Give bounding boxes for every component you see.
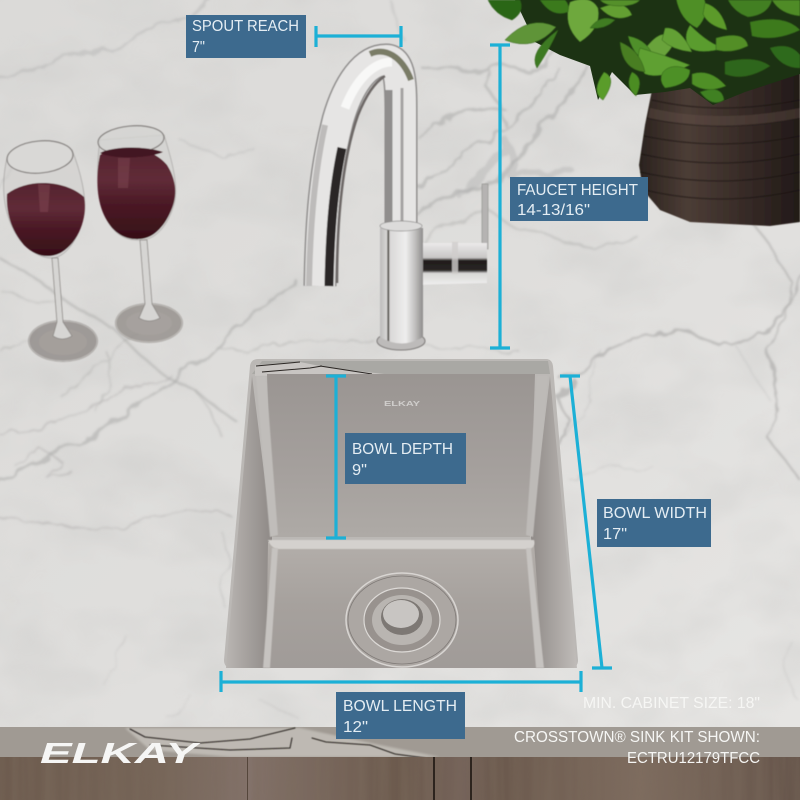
label: bowl width: BOWL WIDTH (603, 505, 707, 522)
faucet lower body (380, 228, 423, 344)
sink kit note: CROSSTOWN® SINK KIT SHOWN: (514, 729, 760, 746)
back wall (267, 374, 535, 537)
label: bowl width (597, 499, 711, 547)
label: bowl depth (345, 433, 466, 484)
corner rounds (256, 376, 278, 537)
dimension: bowl depth arrow (326, 376, 346, 538)
label: spout reach (186, 15, 306, 58)
faucet handle (482, 184, 488, 249)
foliage mass (515, 0, 800, 105)
Elkay logo: ELKAY (40, 738, 201, 770)
label: bowl length: 12" (343, 719, 368, 736)
sink kit note (514, 729, 760, 767)
sink kit note: ECTRU12179TFCC (627, 750, 760, 767)
label: bowl length (336, 692, 465, 739)
sink outline and rim (224, 359, 578, 668)
potted plant (488, 0, 800, 226)
faucet (309, 52, 488, 350)
left wall (226, 376, 272, 668)
label: bowl depth: 9" (352, 462, 367, 479)
label: bowl length: BOWL LENGTH (343, 698, 457, 715)
label: spout reach: SPOUT REACH (192, 18, 299, 35)
wine glass right (97, 123, 183, 343)
leaves (488, 0, 800, 103)
wood cabinet (0, 757, 800, 800)
dimension: bowl width arrow (560, 376, 612, 668)
wine glass left (4, 138, 98, 362)
sink (224, 359, 578, 668)
floor (266, 542, 543, 668)
dimension: bowl length arrow (221, 671, 581, 692)
dimension: faucet height arrow (490, 45, 510, 348)
sink logo: ELKAY (384, 399, 420, 408)
label: faucet height: FAUCET HEIGHT (517, 182, 638, 199)
drain (346, 573, 458, 667)
right wall (531, 376, 577, 668)
dimension: spout reach arrow (316, 26, 401, 47)
label: bowl depth: BOWL DEPTH (352, 441, 453, 458)
faucet base flange (377, 332, 425, 350)
label: bowl width: 17" (603, 526, 627, 543)
faucet spout (309, 52, 411, 286)
label: faucet height: 14-13/16" (517, 202, 590, 219)
label: faucet height (510, 177, 648, 221)
counter edge (0, 727, 800, 758)
label: spout reach: 7" (192, 39, 205, 56)
minimum cabinet size note: MIN. CABINET SIZE: 18" (583, 695, 760, 712)
pot (639, 68, 800, 226)
